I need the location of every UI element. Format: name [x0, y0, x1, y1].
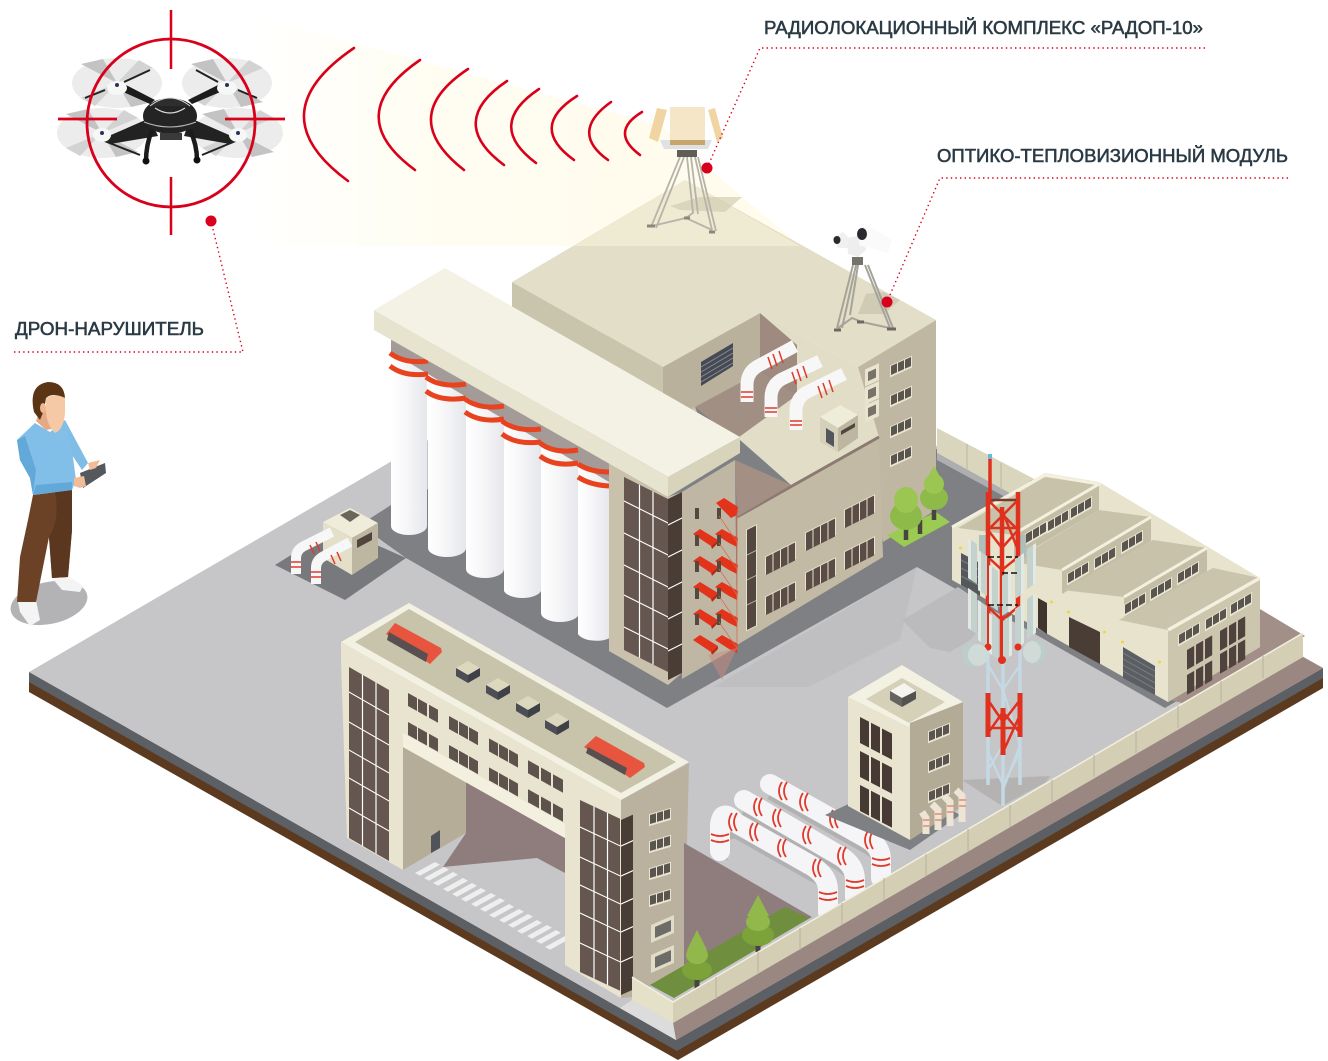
shed section 3 — [1062, 540, 1207, 620]
beam shadow line — [403, 733, 565, 838]
ground shadow near tower — [902, 587, 995, 652]
tower cross bars — [988, 557, 1018, 605]
curtain wall — [624, 477, 682, 680]
gate right-face windows — [649, 808, 674, 973]
gate building — [341, 603, 689, 998]
shed section 2 — [1012, 510, 1151, 594]
operator — [6, 382, 106, 632]
drone upper arms — [119, 84, 225, 104]
crosswalk — [415, 862, 570, 950]
roof inner — [355, 609, 676, 793]
terrace pipes — [741, 346, 844, 430]
shoes — [18, 576, 83, 626]
roof vents — [456, 661, 569, 735]
ear — [40, 403, 46, 413]
shed section 1 — [952, 475, 1099, 560]
wall vent grille — [701, 343, 733, 386]
recess back walls — [663, 313, 797, 440]
label: thermal module: ОПТИКО-ТЕПЛОВИЗИОННЫЙ МОДУЛЬ — [937, 145, 1288, 166]
shed section 4 — [1119, 568, 1260, 702]
right tower wall — [858, 320, 936, 542]
tower red joints — [984, 644, 1022, 664]
neck — [36, 410, 58, 430]
target crosshair — [58, 10, 285, 235]
arm — [62, 420, 88, 470]
radar tripod — [651, 157, 716, 231]
small office building — [825, 665, 963, 850]
lower right wall — [737, 437, 883, 645]
grass strip — [650, 907, 810, 998]
red skylight — [584, 736, 645, 778]
tablet — [80, 463, 106, 488]
trousers shadow — [49, 490, 72, 578]
lower red section — [988, 693, 1020, 755]
radar unit — [647, 107, 742, 232]
rooftop box — [890, 683, 916, 707]
silo red bands — [390, 353, 609, 486]
person shadow — [6, 574, 92, 632]
motor caps — [100, 83, 240, 135]
propellers — [57, 58, 283, 158]
sweater shadow — [17, 436, 72, 495]
radar panels — [649, 107, 723, 157]
pump house — [275, 508, 406, 600]
pipe red bands — [711, 782, 890, 900]
target drone — [57, 58, 283, 164]
mauve yard front — [684, 843, 812, 985]
gate left faces — [341, 642, 621, 998]
railing — [737, 437, 879, 517]
building: factory shed — [952, 473, 1260, 702]
terrace hut — [820, 405, 858, 452]
label: radar: РАДИОЛОКАЦИОННЫЙ КОМПЛЕКС «РАДОП-10» — [764, 17, 1203, 38]
office windows front — [860, 717, 892, 828]
base plate — [29, 296, 1323, 1060]
communication tower — [962, 454, 1050, 806]
main building — [374, 180, 936, 685]
lower white lattice — [988, 645, 1020, 806]
roof side filling down to slab — [512, 282, 700, 420]
upper red section — [988, 492, 1018, 660]
shed doors — [959, 548, 1161, 695]
label: drone — [14, 216, 243, 352]
door — [431, 830, 440, 853]
radar arcs — [304, 48, 642, 181]
back panels — [979, 535, 1026, 560]
silos — [391, 330, 610, 641]
camera body — [832, 225, 892, 265]
motors — [93, 81, 247, 142]
drone thin struts — [85, 70, 257, 155]
red fire escape stairs — [693, 498, 738, 680]
label: drone: ДРОН-НАРУШИТЕЛЬ — [15, 319, 204, 339]
stairwell wall — [682, 460, 737, 679]
left window grid — [349, 667, 389, 861]
camera feet — [834, 322, 896, 330]
office windows side — [928, 723, 950, 803]
terrace floor — [695, 313, 879, 485]
camera tripod — [837, 265, 893, 328]
thermal camera unit — [832, 225, 900, 330]
drone lower arms — [104, 118, 236, 144]
upper roof — [512, 180, 936, 367]
mast — [988, 454, 992, 500]
light beam over roof — [574, 180, 800, 246]
small striped pipes — [922, 790, 966, 834]
dish antennas — [962, 640, 1046, 667]
hair — [33, 382, 65, 420]
window tower left wall — [609, 460, 682, 685]
stair recess shadow — [735, 460, 791, 517]
long slab over silos — [374, 268, 740, 497]
beam window rows — [408, 693, 563, 822]
mauve yard between shed and fence — [1170, 606, 1305, 705]
slab underside — [391, 336, 609, 482]
tower wall windows — [865, 356, 912, 467]
paved road around main building — [360, 380, 1280, 708]
opening back wall — [403, 747, 466, 870]
right pillar windows — [580, 800, 633, 995]
label: thermal module — [882, 145, 1288, 308]
tower base pad — [962, 776, 1050, 806]
trousers — [17, 490, 72, 602]
big white pipes — [720, 784, 881, 920]
ground shadow right — [713, 567, 917, 687]
gate right face — [621, 763, 689, 998]
hands — [74, 460, 100, 488]
radar beam — [250, 15, 800, 246]
face — [46, 396, 65, 433]
camera shadow — [858, 292, 900, 314]
office windows — [765, 494, 875, 616]
label: radar — [702, 17, 1205, 174]
opening shadow — [443, 782, 565, 873]
radar shadow — [670, 197, 742, 212]
red skylight — [386, 623, 442, 664]
antenna panels — [968, 538, 1036, 661]
slit window — [746, 524, 757, 632]
trees behind building — [887, 466, 950, 547]
sweater — [17, 420, 76, 495]
drone body — [142, 98, 200, 164]
wall: back fence — [937, 428, 1040, 516]
radar feet — [647, 218, 715, 232]
gate roof — [341, 603, 689, 800]
trees front — [682, 895, 774, 992]
front fence — [632, 633, 1303, 1023]
